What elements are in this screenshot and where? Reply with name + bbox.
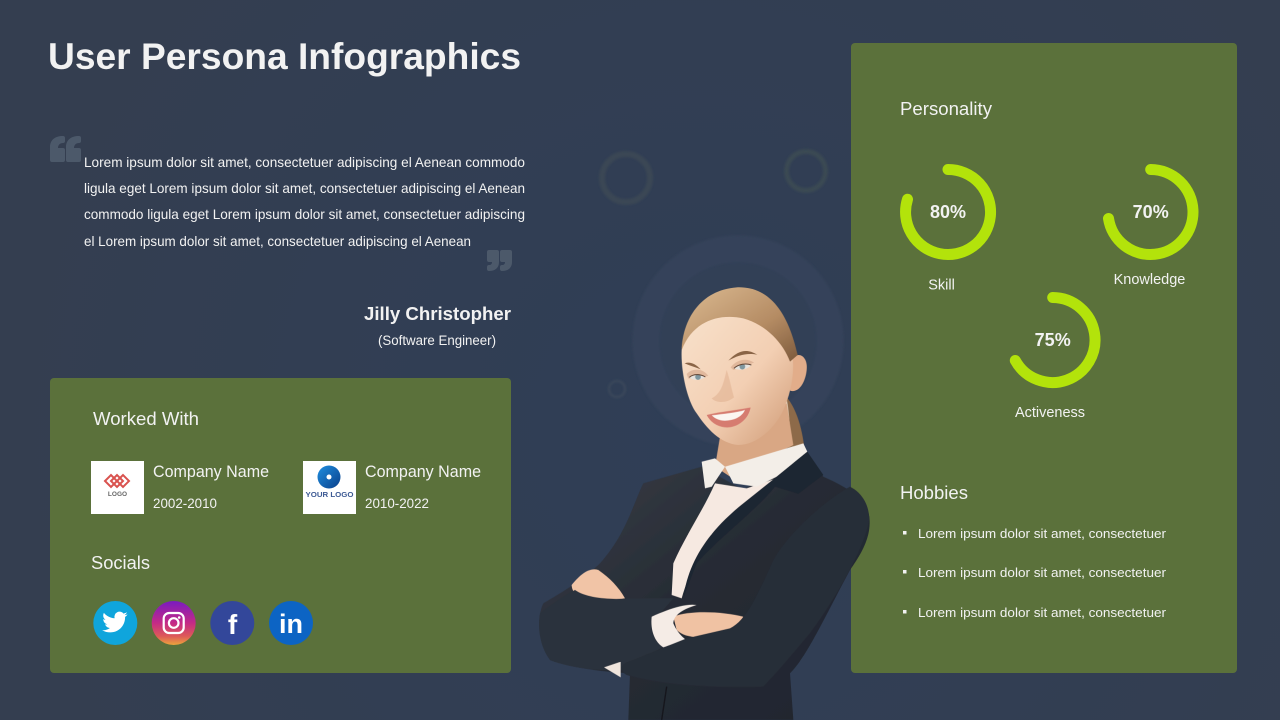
face	[682, 313, 793, 445]
title: User Persona Infographics	[48, 36, 521, 77]
quote text: ligula eget Lorem ipsum dolor sit amet, consectetuer adipiscing el Aenean	[84, 181, 525, 196]
logo: company two: YOUR LOGO	[306, 492, 354, 499]
hobbies list: Lorem ipsum dolor sit amet, consectetuer	[918, 526, 1167, 541]
quote text	[84, 155, 525, 249]
panel: worked with and socials	[50, 378, 511, 673]
icon: linkedin: in	[279, 609, 303, 639]
heading: personality: Personality	[900, 98, 993, 119]
portrait: businesswoman with crossed arms	[539, 287, 870, 720]
company two name: Company Name	[365, 463, 481, 481]
icon: closing quote mark	[487, 250, 512, 271]
heading: socials: Socials	[91, 552, 150, 573]
company one years: 2002-2010	[153, 496, 217, 511]
ring chart: activeness 75%	[1015, 298, 1095, 421]
company two years: 2010-2022	[365, 496, 429, 511]
shirt	[672, 478, 777, 598]
persona role: (Software Engineer)	[378, 333, 496, 348]
hobbies list: Lorem ipsum dolor sit amet, consectetuer	[918, 565, 1167, 580]
ring chart: knowledge 70%: 70%	[1133, 202, 1169, 222]
ring chart: skill 80%: 80%	[930, 202, 966, 222]
ear	[790, 355, 807, 391]
ring chart: knowledge 70%: Knowledge	[1114, 272, 1185, 288]
quote text: commodo ligula eget Lorem ipsum dolor sit amet, consectetuer adipiscing	[84, 207, 525, 222]
jacket body	[539, 452, 870, 720]
eyes	[689, 375, 705, 380]
company one name: Company Name	[153, 463, 269, 481]
logo: company one: LOGO	[108, 491, 127, 498]
hair	[682, 287, 798, 362]
lower cuff	[604, 662, 621, 677]
right forearm sleeve	[622, 487, 869, 687]
left arm sleeve	[539, 590, 673, 670]
icon: linkedin	[269, 601, 313, 645]
icon: instagram	[152, 601, 196, 645]
jacket centre seam	[662, 687, 667, 720]
shirt collar	[702, 443, 807, 488]
quote text: Lorem ipsum dolor sit amet, consectetuer adipiscing el Aenean commodo	[84, 155, 525, 170]
hobbies list: Lorem ipsum dolor sit amet, consectetuer	[918, 605, 1167, 620]
neck	[715, 403, 793, 477]
hobbies list	[903, 526, 1167, 620]
left hand	[572, 569, 625, 601]
shirt cuff	[651, 605, 697, 647]
icon: twitter	[93, 601, 137, 645]
right lapel	[683, 452, 823, 598]
eye shadow	[687, 360, 754, 379]
eyebrows	[685, 351, 757, 369]
ring chart: skill 80%: Skill	[928, 278, 955, 294]
logo: company two	[303, 461, 356, 514]
nose shadow	[712, 370, 734, 402]
ring chart: activeness 75%: Activeness	[1015, 405, 1085, 421]
heading: worked with: Worked With	[93, 408, 199, 429]
decorative circles behind portrait	[602, 152, 830, 433]
icon: facebook: f	[228, 609, 238, 640]
heading: hobbies: Hobbies	[900, 482, 968, 503]
icon: opening quote mark	[50, 136, 81, 162]
quote text: el Lorem ipsum dolor sit amet, consectetuer adipiscing el Aenean	[84, 234, 471, 249]
icon: facebook	[210, 601, 254, 645]
lips and teeth	[707, 407, 751, 427]
ring chart: skill 80%	[906, 169, 991, 294]
ring chart: activeness 75%: 75%	[1035, 330, 1071, 350]
ring chart: knowledge 70%	[1108, 170, 1193, 288]
persona name: Jilly Christopher	[364, 303, 511, 324]
panel: personality and hobbies	[851, 43, 1237, 673]
logo: company one	[91, 461, 144, 514]
right hand	[673, 612, 743, 637]
hair ponytail	[780, 393, 804, 450]
